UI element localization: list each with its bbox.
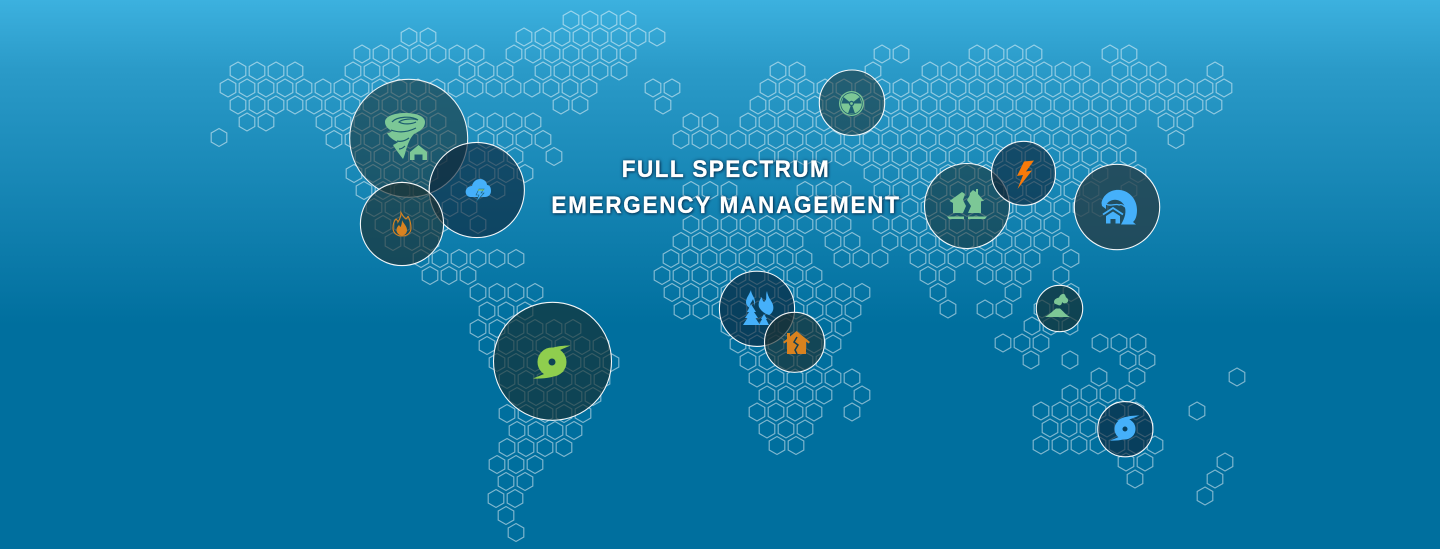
icon: volcano [1045, 294, 1070, 317]
icon: lightning bolt [1017, 160, 1034, 189]
icon: cloud with lightning [466, 179, 491, 202]
hazard circle: volcano [1036, 285, 1083, 332]
title line one: FULL SPECTRUM [622, 156, 830, 183]
icon: radiation symbol [839, 91, 864, 116]
hazard circle: tornado [350, 79, 468, 197]
hazard circle: cyclone [1098, 402, 1153, 457]
hazard circle: house fire [360, 182, 444, 266]
icon: flame [393, 212, 411, 236]
icon: tsunami wave and house [1102, 190, 1137, 224]
hazard circle: earthquake-split house [924, 164, 1010, 248]
icon: cracked house [783, 331, 810, 354]
hazard circle: lightning bolt [992, 141, 1056, 205]
hazard circle: hurricane [494, 302, 612, 420]
hazard circle: radiation [819, 70, 885, 135]
icon: tornado and house [385, 113, 427, 160]
icon: forest fire [743, 290, 773, 325]
title line two: EMERGENCY MANAGEMENT [551, 192, 901, 219]
hazard circle: wildfire [719, 271, 795, 346]
hexagon world map [219, 20, 1237, 532]
hazard circle: earthquake [764, 312, 824, 372]
icon: hurricane symbol [533, 346, 570, 379]
hazard circle: storm cloud [429, 142, 524, 238]
icon: cracked house [947, 189, 987, 219]
title [550, 156, 902, 219]
hazard circle: tsunami [1074, 164, 1160, 250]
icon: cyclone symbol [1110, 416, 1140, 441]
